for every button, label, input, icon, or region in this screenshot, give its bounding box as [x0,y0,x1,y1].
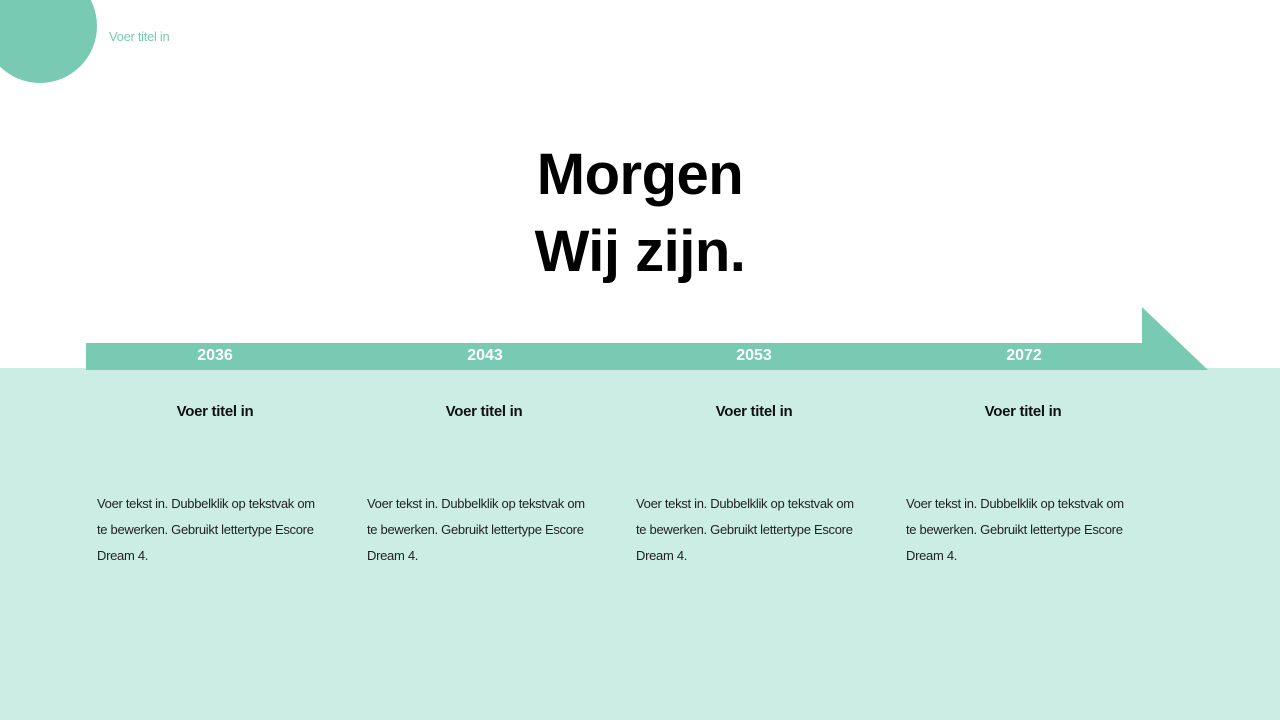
text 2: Voer tekst in. Dubbelklik op tekstvak om te bewerken. Gebruikt lettertype Escore Dream 4. [367,496,585,563]
year 2043: 2043 [467,347,503,364]
heading 2: Voer titel in [446,403,522,420]
year 2053: 2053 [736,347,772,364]
bottom panel [0,368,1280,720]
text 3: Voer tekst in. Dubbelklik op tekstvak om te bewerken. Gebruikt lettertype Escore Dream 4. [636,496,854,563]
heading 4: Voer titel in [985,403,1061,420]
decorative circle [0,0,97,83]
title: Morgen [537,142,743,207]
text 4: Voer tekst in. Dubbelklik op tekstvak om te bewerken. Gebruikt lettertype Escore Dream 4. [906,496,1124,563]
heading 3: Voer titel in [716,403,792,420]
title [534,142,745,284]
title: Wij zijn. [535,219,745,284]
text 1: Voer tekst in. Dubbelklik op tekstvak om te bewerken. Gebruikt lettertype Escore Dream 4. [97,496,315,563]
year 2072: 2072 [1006,347,1042,364]
heading 1: Voer titel in [177,403,253,420]
year 2036: 2036 [197,347,233,364]
header label: Voer titel in [109,29,169,44]
